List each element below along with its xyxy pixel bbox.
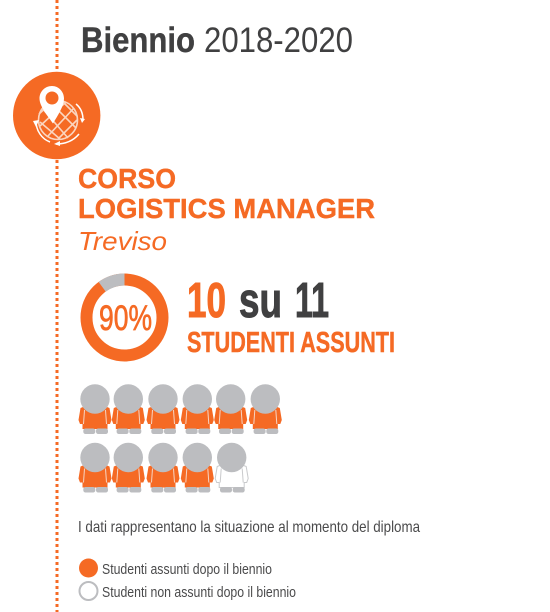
legend: hired [79,558,272,578]
title [81,21,353,60]
title: Biennio [81,21,195,60]
donut chart: 90%: 90% [99,299,152,338]
note text: I dati rappresentano la situazione al momento del diploma [78,519,420,536]
heading: course name: LOGISTICS MANAGER [78,193,375,224]
heading: course name: Treviso [78,226,167,256]
legend: not hired: Studenti non assunti dopo il biennio [102,585,296,601]
legend: not hired [80,582,296,601]
legend: hired: Studenti assunti dopo il biennio [102,562,272,578]
donut chart: 90% [86,280,162,356]
icon: location pin on globe [13,72,100,159]
headline statistic: 11 [295,274,329,328]
headline statistic: STUDENTI ASSUNTI [187,327,395,359]
headline statistic: su [239,274,282,328]
headline statistic: 10 [187,274,226,328]
legend [79,558,296,601]
headline statistic [187,274,395,359]
heading: course name [78,163,375,256]
pictogram: students hired [78,384,282,492]
title: 2018-2020 [204,21,353,60]
heading: course name: CORSO [78,163,176,194]
